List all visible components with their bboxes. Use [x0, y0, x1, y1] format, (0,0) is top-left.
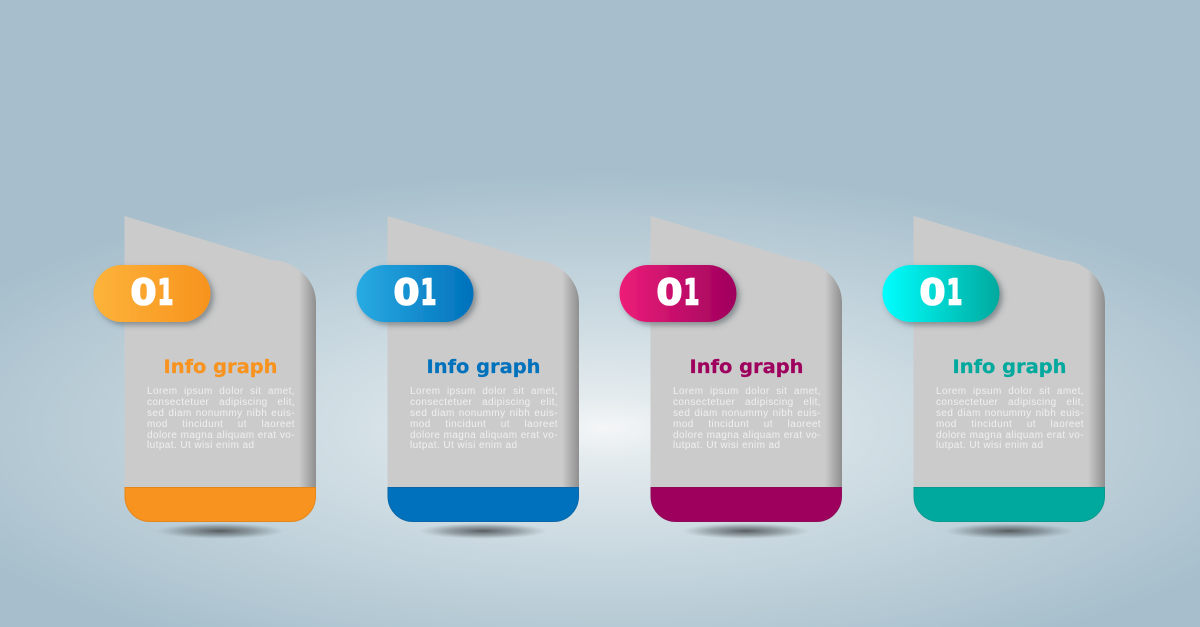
text block — [410, 386, 558, 451]
panel: card 4 teal: consectetuer adipiscing elit, — [936, 397, 1084, 408]
text block — [936, 386, 1084, 451]
heading: Info graph — [164, 356, 278, 378]
panel: card 4 teal: lutpat. Ut wisi enim ad — [936, 440, 1043, 451]
floor shadow — [945, 523, 1073, 539]
panel: card 3 magenta: lutpat. Ut wisi enim ad — [673, 440, 780, 451]
heading: Info graph — [690, 356, 804, 378]
card body — [914, 216, 1105, 488]
panel: card 2 blue: dolore magna aliquam erat vo- — [410, 430, 558, 441]
panel: card 4 teal: Lorem ipsum dolor sit amet, — [936, 386, 1084, 397]
number: 01 — [656, 272, 700, 314]
footer band — [388, 488, 578, 522]
text block — [147, 386, 295, 451]
number pill — [94, 265, 210, 322]
panel: card 3 magenta: consectetuer adipiscing elit, — [673, 397, 821, 408]
footer band — [125, 488, 316, 522]
panel: card 3 magenta: sed diam nonummy nibh euis- — [673, 408, 821, 419]
panel: card 3 magenta — [618, 216, 842, 538]
number pill — [356, 265, 474, 322]
floor shadow — [682, 523, 810, 539]
heading: Info graph — [426, 356, 540, 378]
card body — [650, 216, 842, 488]
heading: Info graph — [952, 356, 1066, 378]
panel: card 1 orange: mod tincidunt ut laoreet — [147, 419, 295, 430]
number: 01 — [920, 272, 962, 314]
panel: card 2 blue: mod tincidunt ut laoreet — [410, 419, 558, 430]
number pill — [620, 265, 736, 322]
text block — [673, 386, 821, 451]
floor shadow — [419, 523, 547, 539]
panel: card 2 blue: Lorem ipsum dolor sit amet, — [410, 386, 558, 397]
panel: card 1 orange: dolore magna aliquam erat vo- — [147, 430, 295, 441]
panel: card 2 blue — [356, 216, 579, 538]
panel: card 3 magenta: Lorem ipsum dolor sit amet, — [673, 386, 821, 397]
floor shadow — [156, 523, 284, 539]
number: 01 — [394, 272, 436, 314]
card body — [388, 216, 579, 488]
panel: card 1 orange: Lorem ipsum dolor sit amet, — [147, 386, 295, 397]
panel: card 1 orange: lutpat. Ut wisi enim ad — [147, 440, 254, 451]
panel: card 4 teal: sed diam nonummy nibh euis- — [936, 408, 1084, 419]
panel: card 1 orange: sed diam nonummy nibh euis- — [147, 408, 295, 419]
panel: card 2 blue: consectetuer adipiscing elit, — [410, 397, 558, 408]
panel: card 4 teal — [882, 216, 1105, 538]
card body — [124, 216, 316, 488]
panel: card 1 orange: consectetuer adipiscing elit, — [147, 397, 295, 408]
panel: card 4 teal: mod tincidunt ut laoreet — [936, 419, 1084, 430]
panel: card 4 teal: dolore magna aliquam erat vo- — [936, 430, 1084, 441]
number: 01 — [130, 272, 174, 314]
footer band — [914, 488, 1104, 522]
panel: card 2 blue: sed diam nonummy nibh euis- — [410, 408, 558, 419]
panel: card 1 orange — [94, 216, 316, 538]
number pill — [882, 265, 1000, 322]
panel: card 3 magenta: dolore magna aliquam erat vo- — [673, 430, 821, 441]
panel: card 3 magenta: mod tincidunt ut laoreet — [673, 419, 821, 430]
footer band — [651, 488, 842, 522]
panel: card 2 blue: lutpat. Ut wisi enim ad — [410, 440, 517, 451]
